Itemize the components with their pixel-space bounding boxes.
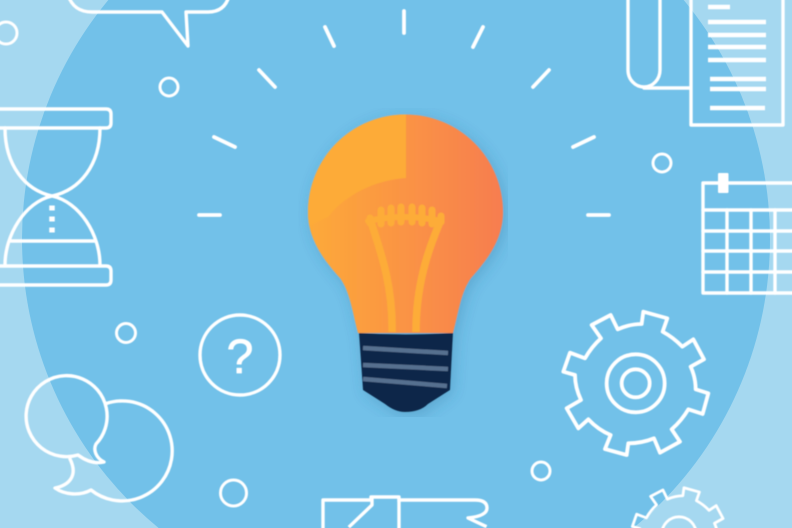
icon: large gear: [563, 312, 708, 455]
icon: document scroll: [628, 0, 783, 125]
icon: question mark circle: ?: [227, 331, 253, 384]
light rays: [199, 11, 609, 215]
bulb shadow: [311, 118, 506, 415]
icon: book bottom: [323, 497, 487, 527]
icon: calendar: [703, 174, 792, 293]
glass highlight: [308, 114, 406, 226]
icon: chat bubbles: [26, 376, 172, 501]
icon: small gear: [632, 488, 726, 528]
icon: question mark circle: [200, 315, 280, 395]
small decorative circles: [0, 22, 671, 506]
filament: [368, 207, 441, 332]
icon: light bulb: [300, 110, 506, 415]
icon: speech bubble top: [68, 0, 229, 46]
base thread lines: [363, 348, 448, 386]
icon: hourglass: [0, 109, 111, 285]
bulb glass: [308, 115, 503, 333]
bulb screw base: [359, 333, 453, 412]
